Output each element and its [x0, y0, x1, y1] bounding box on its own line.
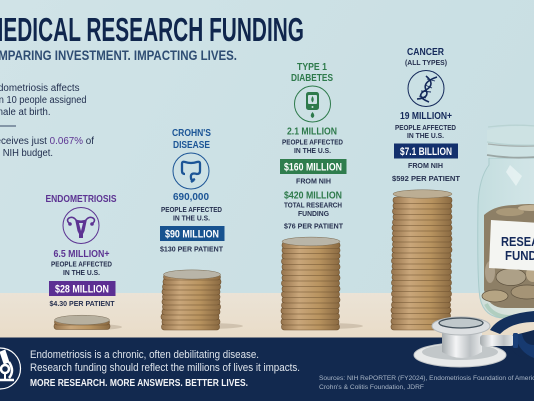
stat: people affected: 19 MILLION+	[400, 110, 452, 122]
sources: Sources: NIH RePORTER (FY2024), Endometriosis Foundation of America,	[319, 375, 534, 382]
coin stack: cancer	[391, 190, 452, 330]
panel: crohn's disease: $90 MILLION	[165, 228, 219, 240]
panel: crohn's disease: IN THE U.S.	[173, 214, 210, 222]
title: MEDICAL RESEARCH FUNDING	[0, 11, 304, 48]
funding badge	[394, 144, 458, 158]
panel: cancer: $7.1 BILLION	[400, 146, 452, 158]
heading: type 1 diabetes: DIABETES	[291, 72, 333, 84]
icon: glucose meter	[294, 86, 330, 122]
panel: cancer: IN THE U.S.	[407, 131, 444, 140]
coin stack: endometriosis	[54, 315, 122, 330]
funding badge	[49, 281, 116, 296]
message text: MORE RESEARCH. MORE ANSWERS. BETTER LIVES.	[30, 378, 248, 389]
panel: endometriosis: IN THE U.S.	[63, 268, 100, 277]
heading: cancer: CANCER	[407, 46, 444, 58]
icon: intestine	[173, 153, 209, 189]
jar label	[489, 220, 534, 271]
heading: crohn's: CROHN'S	[172, 127, 211, 139]
sources: Crohn's & Colitis Foundation, JDRF	[319, 384, 424, 391]
panel: type 1 diabetes: FUNDING	[298, 209, 329, 218]
panel: cancer: PEOPLE AFFECTED	[395, 123, 457, 132]
panel: type 1 diabetes	[280, 61, 346, 230]
stat: people affected: 2.1 MILLION	[287, 126, 337, 138]
panel: endometriosis: $28 MILLION	[55, 284, 109, 296]
panel: cancer: (ALL TYPES)	[405, 58, 447, 67]
icon: microscope	[0, 348, 20, 389]
panel: cancer	[392, 46, 460, 183]
panel: type 1 diabetes: IN THE U.S.	[294, 146, 331, 155]
intro text block	[0, 83, 94, 159]
message text: Research funding should reflect the millions of lives it impacts.	[30, 362, 300, 374]
heading: endometriosis: ENDOMETRIOSIS	[46, 193, 116, 205]
stat: people affected: 690,000	[173, 191, 209, 203]
heading: crohn's: DISEASE	[173, 139, 210, 151]
from nih: FROM NIH	[408, 161, 443, 170]
from nih: FROM NIH	[296, 176, 331, 186]
per patient: $130 PER PATIENT	[160, 244, 223, 254]
per patient: $76 PER PATIENT	[284, 222, 343, 230]
panel: type 1 diabetes: PEOPLE AFFECTED	[282, 138, 344, 146]
panel: endometriosis	[46, 193, 116, 308]
coin stack: crohn's	[161, 270, 243, 330]
funding badge	[160, 226, 224, 241]
panel: type 1 diabetes: $160 MILLION	[284, 162, 342, 174]
stat: people affected: 6.5 MILLION+	[54, 248, 110, 260]
heading: type 1 diabetes	[291, 61, 333, 84]
heading: crohn's	[172, 127, 211, 151]
bottom banner	[0, 338, 534, 401]
message text	[30, 349, 300, 389]
icon: dna helix	[408, 70, 444, 106]
jar of coins	[478, 125, 534, 318]
coin stack: type 1 diabetes	[281, 237, 363, 330]
stethoscope	[414, 311, 534, 367]
funding badge	[280, 159, 346, 174]
per patient: $592 PER PATIENT	[392, 174, 460, 183]
panel: type 1 diabetes: TOTAL RESEARCH	[284, 200, 342, 210]
panel: crohn's disease: PEOPLE AFFECTED	[161, 205, 223, 214]
sources	[319, 375, 534, 391]
heading: type 1 diabetes: TYPE 1	[297, 61, 327, 73]
per patient: $4.30 PER PATIENT	[50, 299, 115, 308]
message text: Endometriosis is a chronic, often debilitating disease.	[30, 349, 259, 361]
total research funding: $420 MILLION	[284, 190, 342, 202]
panel: endometriosis: PEOPLE AFFECTED	[51, 260, 113, 268]
panel: crohn's disease	[160, 127, 224, 254]
icon: uterus	[63, 208, 99, 244]
